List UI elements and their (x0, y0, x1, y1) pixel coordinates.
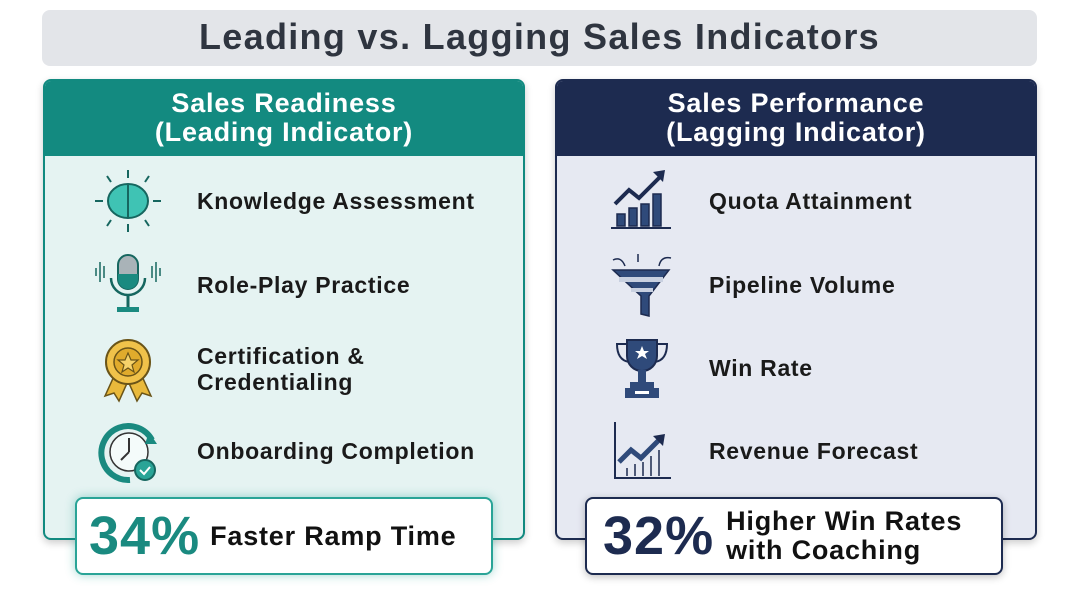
heading: sales readiness: (Leading Indicator) (155, 117, 413, 147)
panel: sales readiness (43, 79, 525, 540)
text: revenue forecast: Revenue Forecast (709, 438, 918, 464)
callout: 32% (585, 497, 1003, 575)
callout: 34%: 34% (89, 506, 200, 566)
callout: 32%: with Coaching (726, 535, 921, 565)
heading: sales performance: Sales Performance (668, 88, 924, 118)
icon: bar chart (611, 170, 671, 229)
callout: 34% (75, 497, 493, 575)
callout: 32%: Higher Win Rates (726, 506, 962, 536)
title (42, 10, 1037, 66)
text: certification (197, 343, 365, 395)
heading: sales readiness: Sales Readiness (171, 88, 397, 118)
text: pipeline volume: Pipeline Volume (709, 272, 895, 298)
text: certification: Credentialing (197, 369, 353, 395)
heading: sales readiness (45, 81, 523, 156)
text: win rate: Win Rate (709, 355, 813, 381)
text: onboarding completion: Onboarding Completion (197, 438, 475, 464)
panel: sales performance (555, 79, 1037, 540)
icon: trophy (616, 339, 668, 398)
callout: 32%: 32% (603, 506, 714, 566)
heading: sales performance: (Lagging Indicator) (666, 117, 926, 147)
icon: forecast chart (614, 422, 671, 479)
title: Leading vs. Lagging Sales Indicators (199, 16, 880, 57)
heading: sales performance (557, 81, 1035, 156)
text: certification: Certification & (197, 343, 365, 369)
text: knowledge assessment: Knowledge Assessment (197, 188, 475, 214)
icon: funnel (611, 254, 672, 317)
text: quota attainment: Quota Attainment (709, 188, 912, 214)
icon: microphone (95, 254, 161, 312)
icon: badge (104, 339, 152, 402)
icon: brain (95, 170, 161, 232)
callout: 34%: Faster Ramp Time (210, 520, 456, 550)
text: role-play practice: Role-Play Practice (197, 272, 410, 298)
icon: clock (98, 423, 157, 483)
